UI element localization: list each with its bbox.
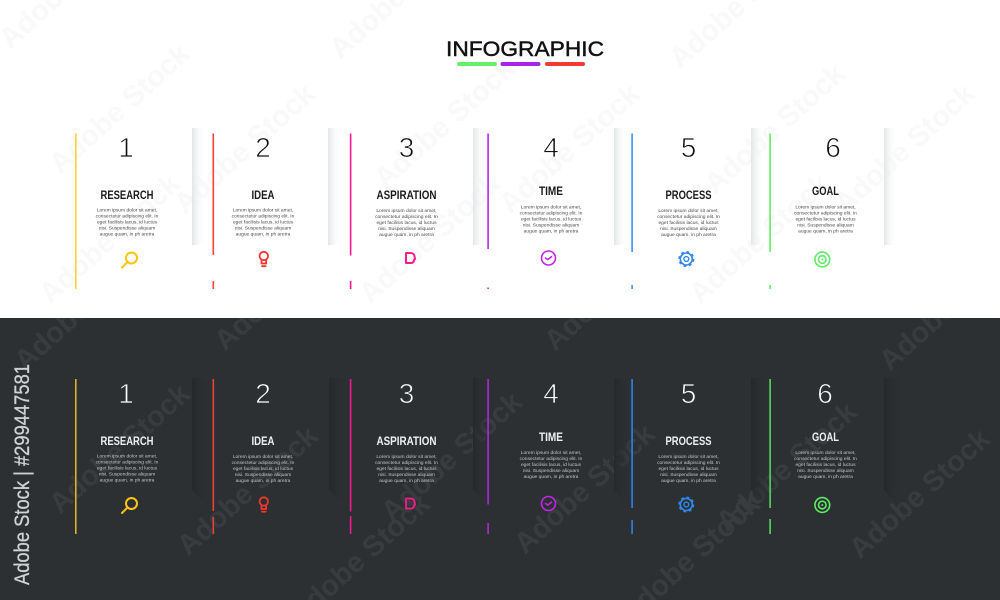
body text: eget facilisis lacus, id luctus xyxy=(658,466,719,472)
body text: consectetur adipiscing elit. In xyxy=(96,214,159,220)
body text: eget facilisis lacus, id luctus xyxy=(521,462,582,468)
title underline bars xyxy=(457,62,585,66)
body text xyxy=(232,454,295,484)
watermarks: dark panel: Adobe Stock xyxy=(43,377,197,520)
number: 6 xyxy=(825,132,841,163)
watermarks: light panel: Adobe Stock xyxy=(353,167,507,310)
number: 6 xyxy=(817,378,833,409)
body text: Lorem ipsum dolor sit amet, xyxy=(795,204,856,210)
body text: augue quam, in ph aretra xyxy=(100,232,155,238)
watermarks: light panel xyxy=(0,0,982,310)
body text: augue quam, in ph aretra xyxy=(661,478,716,484)
body text: nisi. Suspendisse aliquam xyxy=(99,472,155,478)
body text: augue quam, in ph aretra xyxy=(798,474,853,480)
stock id label: Adobe Stock | #299447581 xyxy=(11,364,34,585)
panel: light 4 time xyxy=(487,132,583,289)
shadows: dark row xyxy=(192,378,905,511)
heading: RESEARCH xyxy=(100,190,154,202)
body text xyxy=(232,208,295,238)
panel: dark 1 research xyxy=(75,378,159,534)
icon: gear xyxy=(679,252,694,266)
body text: augue quam, in ph aretra xyxy=(524,228,579,234)
body text: consectetur adipiscing elit. In xyxy=(657,214,720,220)
panel: light 2 idea xyxy=(212,132,295,289)
number: 3 xyxy=(399,378,414,409)
body text: nisi. Suspendisse aliquam xyxy=(660,226,717,232)
body text: eget facilisis lacus, id luctus xyxy=(376,220,437,226)
watermarks: light panel: Adobe Stock xyxy=(33,167,187,310)
icon: target xyxy=(815,252,830,267)
body text: Lorem ipsum dolor sit amet, xyxy=(376,208,437,214)
accent line xyxy=(631,379,633,534)
icon: gear xyxy=(679,497,694,512)
heading: ASPIRATION xyxy=(376,190,436,202)
body text: nisi. Suspendisse aliquam xyxy=(235,226,291,232)
body text xyxy=(96,454,159,484)
watermarks: light panel: Adobe Stock xyxy=(368,52,522,195)
body text: consectetur adipiscing elit. In xyxy=(520,210,583,216)
body text: consectetur adipiscing elit. In xyxy=(375,460,438,466)
body text: nisi. Suspendisse aliquam xyxy=(235,472,291,478)
panel: dark 3 aspiration xyxy=(350,378,438,534)
body text xyxy=(794,450,857,480)
body text: augue quam, in ph aretra xyxy=(798,228,853,234)
panel: dark 4 time xyxy=(487,378,583,534)
heading: TIME xyxy=(539,432,563,444)
body text: nisi. Suspendisse aliquam xyxy=(797,468,854,474)
body text: nisi. Suspendisse aliquam xyxy=(660,472,717,478)
heading: IDEA xyxy=(252,436,274,448)
number: 5 xyxy=(681,378,696,409)
title: INFOGRAPHIC xyxy=(446,38,604,61)
accent line xyxy=(769,134,771,289)
number: 4 xyxy=(543,378,559,409)
icon: light bulb xyxy=(260,252,268,266)
icon: magnifier xyxy=(122,498,137,513)
body text: Lorem ipsum dolor sit amet, xyxy=(658,454,719,460)
accent line xyxy=(212,134,214,289)
body text: consectetur adipiscing elit. In xyxy=(375,214,438,220)
body text xyxy=(794,204,857,234)
body text: Lorem ipsum dolor sit amet, xyxy=(658,208,719,214)
panel: dark 5 process xyxy=(631,378,720,534)
number: 1 xyxy=(118,378,134,409)
heading: GOAL xyxy=(812,432,839,444)
number: 5 xyxy=(681,132,696,163)
body text xyxy=(375,454,438,484)
panel: light 5 process xyxy=(631,132,720,289)
icon: clock xyxy=(542,251,556,265)
body text: nisi. Suspendisse aliquam xyxy=(378,226,435,232)
body text: augue quam, in ph aretra xyxy=(379,232,434,238)
body text: eget facilisis lacus, id luctus xyxy=(233,466,294,472)
panel: dark 2 idea xyxy=(212,378,295,534)
body text: consectetur adipiscing elit. In xyxy=(794,456,857,462)
watermarks: dark panel: Adobe Stock xyxy=(508,417,662,560)
body text: eget facilisis lacus, id luctus xyxy=(376,466,437,472)
icon: head profile xyxy=(406,253,415,263)
accent line xyxy=(212,379,214,534)
number: 4 xyxy=(543,132,559,163)
watermarks: light panel: Adobe Stock xyxy=(683,167,837,310)
body text: eget facilisis lacus, id luctus xyxy=(97,220,158,226)
body text xyxy=(657,208,720,238)
body text: consectetur adipiscing elit. In xyxy=(96,460,159,466)
body text: eget facilisis lacus, id luctus xyxy=(233,220,294,226)
watermarks: dark panel: Adobe Stock xyxy=(843,422,997,565)
icon: light bulb xyxy=(260,497,268,512)
accent line xyxy=(350,379,351,534)
body text: eget facilisis lacus, id luctus xyxy=(97,466,158,472)
body text: nisi. Suspendisse aliquam xyxy=(378,472,435,478)
watermarks: light panel: Adobe Stock xyxy=(168,77,322,220)
body text: eget facilisis lacus, id luctus xyxy=(521,216,582,222)
watermarks: light panel: Adobe Stock xyxy=(828,77,982,220)
panel: light 6 goal xyxy=(769,132,857,289)
number: 2 xyxy=(255,378,271,409)
accent line xyxy=(487,134,489,289)
body text: Lorem ipsum dolor sit amet, xyxy=(795,450,856,456)
body text: eget facilisis lacus, id luctus xyxy=(795,216,856,222)
background: light panel xyxy=(0,0,1000,318)
heading: TIME xyxy=(539,186,563,198)
body text: augue quam, in ph aretra xyxy=(236,232,291,238)
accent line xyxy=(769,379,771,534)
number: 2 xyxy=(255,132,271,163)
heading: GOAL xyxy=(812,186,839,198)
watermarks: dark panel: Adobe Stock xyxy=(375,385,529,528)
body text: nisi. Suspendisse aliquam xyxy=(523,222,579,228)
icon: head profile xyxy=(406,498,415,508)
watermarks: dark panel: Adobe Stock xyxy=(8,234,162,377)
body text: nisi. Suspendisse aliquam xyxy=(99,226,155,232)
icon: target xyxy=(815,498,830,512)
heading: IDEA xyxy=(252,190,274,202)
watermarks: dark panel xyxy=(8,214,1000,600)
body text: Lorem ipsum dolor sit amet, xyxy=(521,204,581,210)
body text: Lorem ipsum dolor sit amet, xyxy=(233,208,293,214)
watermarks: light panel: Adobe Stock xyxy=(43,37,197,180)
heading: PROCESS xyxy=(666,436,712,448)
body text xyxy=(375,208,438,238)
body text: Lorem ipsum dolor sit amet, xyxy=(521,450,581,456)
icon: magnifier xyxy=(122,252,137,268)
watermarks: light panel: Adobe Stock xyxy=(493,77,647,220)
body text: nisi. Suspendisse aliquam xyxy=(797,222,854,228)
body text: eget facilisis lacus, id luctus xyxy=(795,462,856,468)
accent line xyxy=(631,134,633,289)
shadows: light row xyxy=(192,128,897,245)
body text: eget facilisis lacus, id luctus xyxy=(658,220,719,226)
body text: nisi. Suspendisse aliquam xyxy=(523,468,579,474)
watermarks: dark panel: Adobe Stock xyxy=(208,214,362,357)
accent line xyxy=(487,379,489,534)
heading: PROCESS xyxy=(666,190,712,202)
watermarks: dark panel: Adobe Stock xyxy=(710,395,864,538)
body text: augue quam, in ph aretra xyxy=(524,474,579,480)
body text: consectetur adipiscing elit. In xyxy=(657,460,720,466)
heading: ASPIRATION xyxy=(376,436,436,448)
watermarks: dark panel: Adobe Stock xyxy=(538,214,692,357)
number: 1 xyxy=(118,132,134,163)
icon: clock xyxy=(542,496,556,510)
body text: augue quam, in ph aretra xyxy=(661,232,716,238)
body text: consectetur adipiscing elit. In xyxy=(232,214,295,220)
body text: consectetur adipiscing elit. In xyxy=(232,460,295,466)
body text: Lorem ipsum dolor sit amet, xyxy=(97,208,157,214)
accent line xyxy=(75,379,77,534)
body text: Lorem ipsum dolor sit amet, xyxy=(376,454,437,460)
body text xyxy=(96,208,159,238)
watermarks: light panel: Adobe Stock xyxy=(698,57,852,200)
body text: Lorem ipsum dolor sit amet, xyxy=(97,454,157,460)
body text: augue quam, in ph aretra xyxy=(100,478,155,484)
body text: consectetur adipiscing elit. In xyxy=(520,456,583,462)
body text: augue quam, in ph aretra xyxy=(379,478,434,484)
body text: Lorem ipsum dolor sit amet, xyxy=(233,454,293,460)
watermarks: dark panel: Adobe Stock xyxy=(171,419,325,562)
body text xyxy=(520,204,583,234)
body text xyxy=(657,454,720,484)
panel: light 1 research xyxy=(75,132,159,289)
panel: dark 6 goal xyxy=(769,378,857,534)
accent line xyxy=(350,134,351,289)
number: 3 xyxy=(399,132,414,163)
accent line xyxy=(75,134,77,289)
body text: consectetur adipiscing elit. In xyxy=(794,210,857,216)
body text xyxy=(520,450,583,480)
heading: RESEARCH xyxy=(100,436,154,448)
body text: augue quam, in ph aretra xyxy=(236,478,291,484)
background: dark panel xyxy=(0,318,1000,600)
panel: light 3 aspiration xyxy=(350,132,438,289)
